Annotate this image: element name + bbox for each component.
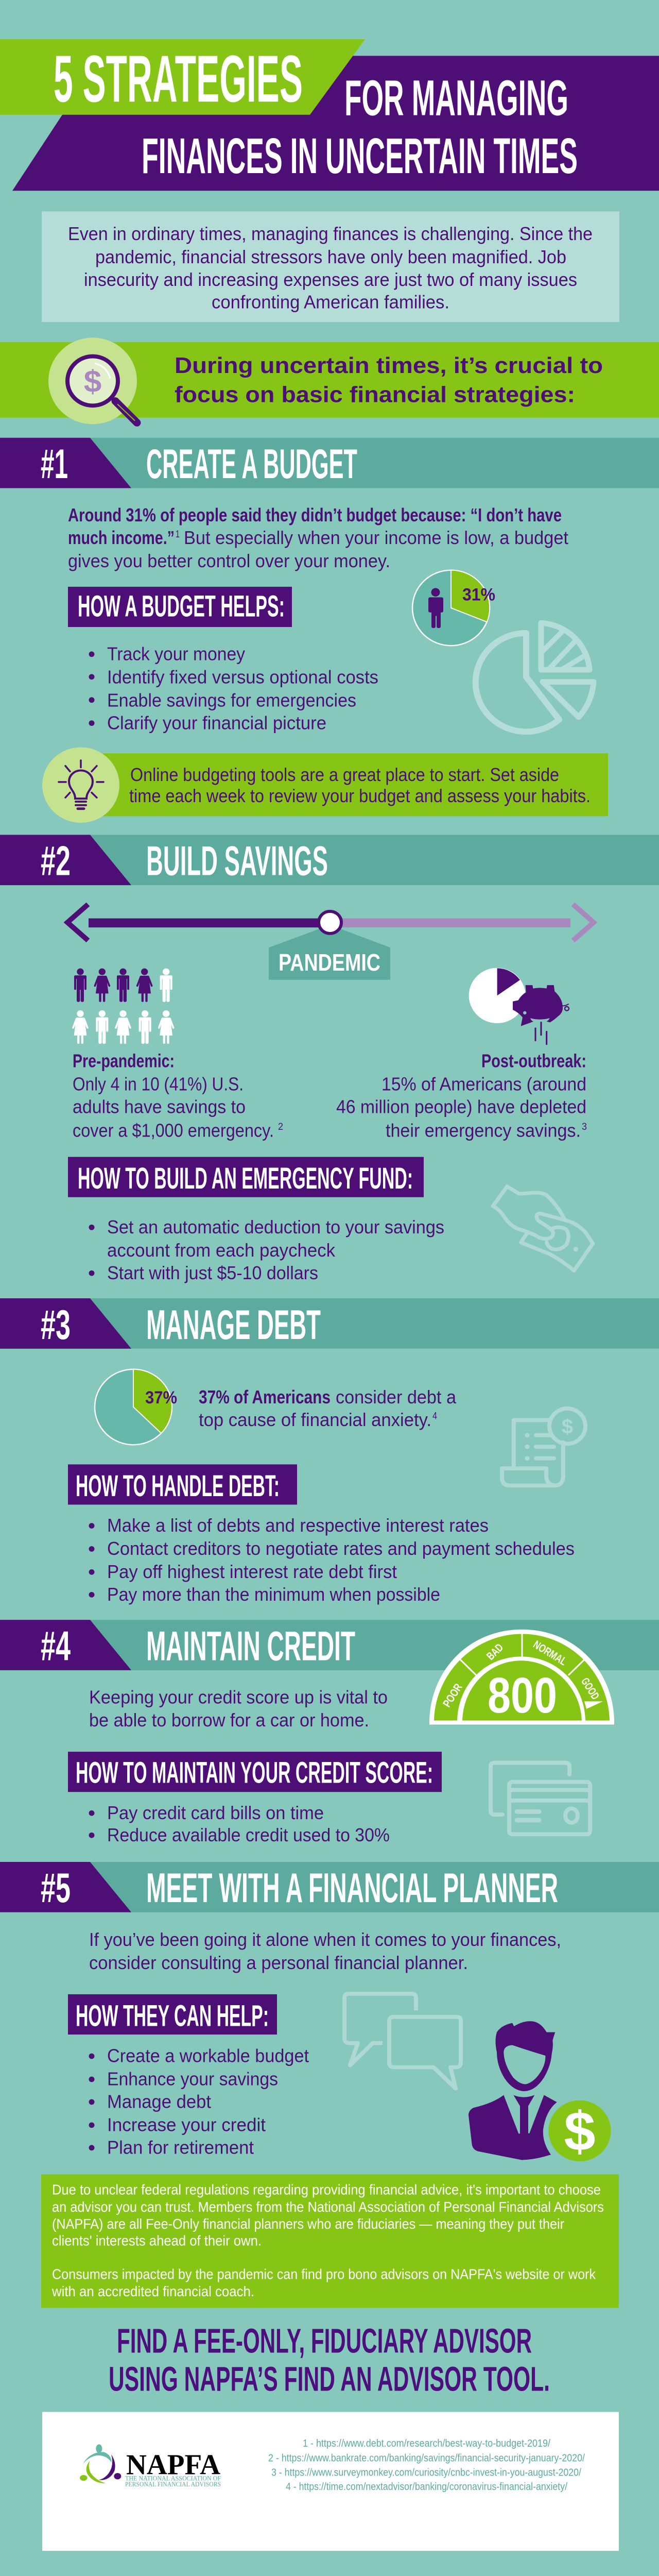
panel: advisor advice: clients' interests ahead of their own. <box>52 2233 262 2248</box>
text: pre-pandemic stat <box>73 1050 283 1141</box>
logo: NAPFA: THE NATIONAL ASSOCIATION OF <box>125 2475 221 2482</box>
text: planner intro: If you’ve been going it alone when it comes to your finances, <box>89 1929 561 1950</box>
bullet list: debt <box>89 1515 575 1605</box>
bullet list: planner: Plan for retirement <box>107 2137 254 2158</box>
text: pre-pandemic stat: adults have savings to <box>73 1096 246 1117</box>
callout: budgeting tip: time each week to review your budget and assess your habits. <box>129 785 591 806</box>
pie chart: 31% <box>412 570 495 646</box>
text: credit intro <box>89 1687 388 1731</box>
text: post-outbreak stat: Post-outbreak: <box>481 1050 586 1072</box>
section header: #2 build savings: BUILD SAVINGS <box>146 838 328 884</box>
text: debt statistic: consider debt a <box>336 1387 457 1408</box>
pie chart: 31%: 31% <box>462 585 495 604</box>
section header: #4 maintain credit: MAINTAIN CREDIT <box>146 1623 355 1669</box>
bullet list: credit: Pay credit card bills on time <box>107 1802 324 1823</box>
intro panel: confronting American families. <box>212 292 449 313</box>
bullet list: planner: Manage debt <box>107 2091 211 2112</box>
panel: footer <box>42 2412 619 2551</box>
timeline: PANDEMIC <box>279 950 380 976</box>
budget paragraph: gives you better control over your money. <box>68 550 390 571</box>
panel: advisor advice: (NAPFA) are all Fee-Only financial planners who are fiduciaries — meaning they put their <box>52 2216 564 2232</box>
text: debt statistic <box>199 1387 457 1430</box>
text: debt statistic: 37% of Americans <box>199 1387 331 1408</box>
references: 1 - https://www.debt.com/research/best-way-to-budget-2019/ <box>303 2437 550 2449</box>
logo: NAPFA <box>80 2444 221 2488</box>
bullet list: budget: Clarify your financial picture <box>107 713 326 733</box>
gauge: credit score 800: GOOD <box>579 1675 602 1702</box>
panel: advisor advice: Consumers impacted by the pandemic can find pro bono advisors on NAPFA's website or work <box>52 2266 596 2282</box>
subheading: how to handle debt <box>68 1464 297 1504</box>
references <box>268 2437 585 2493</box>
icon: speech bubbles <box>344 1994 461 2089</box>
section header: #3 manage debt <box>0 1298 659 1349</box>
section header: #3 manage debt: #3 <box>41 1302 71 1348</box>
bullet list: debt: Make a list of debts and respective interest rates <box>107 1515 489 1536</box>
section header: #1 create a budget <box>0 438 659 488</box>
intro panel: pandemic, financial stressors have only been magnified. Job <box>95 246 566 267</box>
green band: key message <box>0 337 659 424</box>
panel: advisor advice: Due to unclear federal regulations regarding providing financial advice, it's important to choose <box>52 2182 601 2198</box>
bullet list: emergency fund: account from each paycheck <box>107 1240 336 1261</box>
bullet list: budget: Track your money <box>107 643 246 664</box>
icon: magnifier: $ <box>84 364 101 399</box>
text: post-outbreak stat: their emergency savings. <box>386 1120 581 1141</box>
bullet list: budget: Enable savings for emergencies <box>107 690 356 710</box>
icon group: ten people <box>73 969 174 1044</box>
icon: financial advisor with dollar coin <box>469 2021 611 2163</box>
panel: advisor advice <box>41 2175 619 2308</box>
logo: NAPFA: PERSONAL FINANCIAL ADVISORS <box>125 2481 221 2488</box>
text: credit intro: be able to borrow for a car or home. <box>89 1710 369 1731</box>
text: post-outbreak stat <box>336 1050 587 1141</box>
pie chart: 37% <box>95 1369 177 1445</box>
icon: light bulb <box>59 760 103 809</box>
title banner <box>0 39 659 191</box>
bullet list: budget: Identify fixed versus optional costs <box>107 667 378 687</box>
section header: #4 maintain credit <box>0 1620 659 1670</box>
timeline <box>67 904 594 980</box>
bullet list: planner: Create a workable budget <box>107 2045 309 2066</box>
subheading: how to build an emergency fund: HOW TO BUILD AN EMERGENCY FUND: <box>78 1161 413 1195</box>
logo: NAPFA: NAPFA <box>126 2449 220 2481</box>
icon: hand with money <box>493 1187 593 1270</box>
section header: #2 build savings <box>0 835 659 885</box>
bullet list: credit <box>89 1802 390 1845</box>
call to action <box>109 2322 550 2398</box>
section header: #4 maintain credit: #4 <box>41 1623 71 1669</box>
section header: #1 create a budget: CREATE A BUDGET <box>146 441 357 487</box>
text: credit intro: Keeping your credit score up is vital to <box>89 1687 388 1707</box>
references: 3 - https://www.surveymonkey.com/curiosity/cnbc-invest-in-you-august-2020/ <box>271 2467 581 2479</box>
bullet list: emergency fund: Start with just $5-10 dollars <box>107 1262 318 1283</box>
text: post-outbreak stat: 46 million people) have depleted <box>336 1096 586 1117</box>
text: pre-pandemic stat: 2 <box>278 1121 283 1132</box>
callout: budgeting tip <box>42 747 608 823</box>
icon: outline pie chart <box>476 623 594 732</box>
intro panel: Even in ordinary times, managing finances is challenging. Since the <box>68 223 593 244</box>
text: post-outbreak stat: 3 <box>582 1121 587 1132</box>
panel: advisor advice: with an accredited financial coach. <box>51 2283 254 2299</box>
intro panel: insecurity and increasing expenses are just two of many issues <box>84 269 577 290</box>
references: 4 - https://time.com/nextadvisor/banking/coronavirus-financial-anxiety/ <box>286 2481 567 2493</box>
text: pre-pandemic stat: Only 4 in 10 (41%) U.S. <box>73 1074 244 1095</box>
section header: #5 meet with a financial planner: #5 <box>41 1865 71 1911</box>
bullet list: debt: Contact creditors to negotiate rates and payment schedules <box>107 1538 575 1559</box>
bullet list: planner: Increase your credit <box>107 2114 266 2135</box>
gauge: credit score 800 <box>429 1630 614 1724</box>
green band: key message: During uncertain times, it’s crucial to <box>175 353 603 378</box>
panel: advisor advice: an advisor you can trust. Members from the National Association of Personal Financial Advisors <box>52 2199 604 2215</box>
title banner: 5 STRATEGIES <box>54 42 303 116</box>
text: pre-pandemic stat: Pre-pandemic: <box>73 1050 175 1072</box>
icon: financial advisor with dollar coin: $ <box>564 2101 596 2163</box>
subheading: how a budget helps <box>68 587 292 627</box>
subheading: how they can help: HOW THEY CAN HELP: <box>76 1998 269 2032</box>
text: planner intro <box>89 1929 561 1973</box>
text: debt statistic: top cause of financial anxiety. <box>199 1410 431 1430</box>
budget paragraph: much income.” <box>68 527 175 548</box>
bullet list: credit: Reduce available credit used to 30% <box>107 1824 390 1845</box>
subheading: how a budget helps: HOW A BUDGET HELPS: <box>78 589 285 623</box>
intro panel <box>42 211 619 322</box>
icon: pie and piggy bank <box>469 968 569 1044</box>
section header: #2 build savings: #2 <box>41 838 71 884</box>
budget paragraph: But especially when your income is low, a budget <box>184 527 568 548</box>
references: 2 - https://www.bankrate.com/banking/savings/financial-security-january-2020/ <box>268 2452 585 2464</box>
bullet list: budget <box>89 643 378 733</box>
bullet list: emergency fund: Set an automatic deduction to your savings <box>107 1216 444 1238</box>
icon: magnifier <box>67 357 137 422</box>
section header: #3 manage debt: MANAGE DEBT <box>146 1302 321 1348</box>
callout: budgeting tip: Online budgeting tools are a great place to start. Set aside <box>130 764 559 785</box>
bullet list: planner <box>89 2045 309 2158</box>
subheading: how they can help <box>68 1994 277 2035</box>
pie chart: 37%: 37% <box>145 1388 177 1408</box>
text: planner intro: consider consulting a personal financial planner. <box>89 1952 468 1973</box>
section header: #1 create a budget: #1 <box>41 441 68 487</box>
gauge: credit score 800: 800 <box>488 1667 557 1723</box>
subheading: how to build an emergency fund <box>68 1157 424 1197</box>
bullet list: debt: Pay off highest interest rate debt first <box>107 1561 397 1582</box>
bullet list: planner: Enhance your savings <box>107 2069 278 2090</box>
text: pre-pandemic stat: cover a $1,000 emergency. <box>73 1120 274 1141</box>
icon: receipt: $ <box>562 1415 573 1438</box>
subheading: how to maintain your credit score <box>68 1752 442 1792</box>
budget paragraph <box>68 504 568 571</box>
budget paragraph: 1 <box>176 529 180 540</box>
icon: credit cards <box>491 1763 590 1834</box>
gauge: credit score 800: NORMAL <box>531 1638 569 1668</box>
bullet list: emergency fund <box>89 1216 444 1283</box>
text: post-outbreak stat: 15% of Americans (around <box>381 1074 586 1095</box>
icon: receipt <box>502 1409 585 1485</box>
text: debt statistic: 4 <box>432 1411 437 1421</box>
subheading: how to handle debt: HOW TO HANDLE DEBT: <box>76 1469 280 1503</box>
bullet list: debt: Pay more than the minimum when possible <box>107 1584 440 1605</box>
gauge: credit score 800: POOR <box>440 1681 465 1709</box>
gauge: credit score 800: BAD <box>484 1641 506 1663</box>
green band: key message: focus on basic financial strategies: <box>175 382 575 407</box>
